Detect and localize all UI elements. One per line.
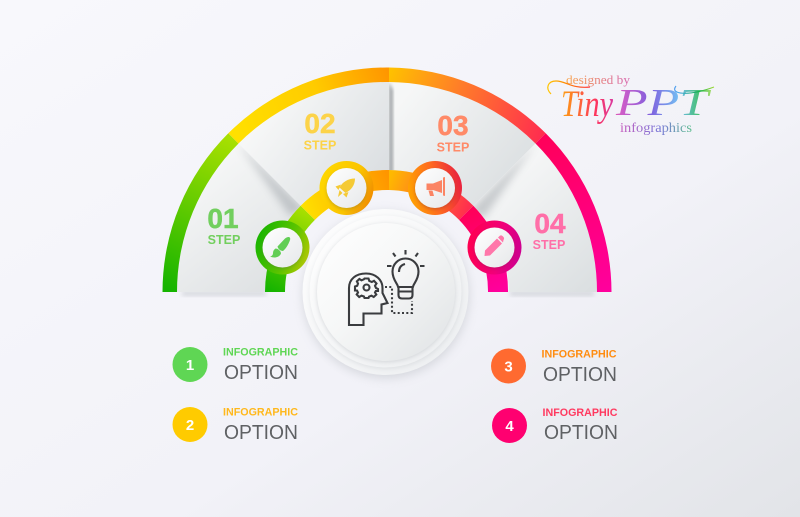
panel: step 1 wedge (177, 144, 301, 292)
panel: step 4 wedge (473, 144, 597, 292)
step 2 label (304, 108, 336, 152)
legend item 4: INFOGRAPHIC (542, 407, 618, 419)
outer colour arc (162, 67, 612, 292)
logo: designed by Tiny PPT infographics: PPT (615, 82, 712, 124)
dotted link (385, 287, 412, 313)
inner colour arc (265, 170, 508, 292)
inner segment 2 (301, 170, 389, 220)
inner segment 4 (459, 206, 508, 292)
logo: designed by Tiny PPT infographics: Tiny (561, 84, 613, 125)
legend item 1 (172, 346, 298, 384)
step 4 label (533, 208, 566, 252)
arc segment 3 (389, 68, 546, 144)
legend item 3: OPTION (543, 364, 617, 386)
icon: pencil (484, 235, 504, 256)
legend item 2: 2 (186, 417, 194, 434)
step 4 label: 04 (534, 208, 566, 239)
gear (355, 278, 378, 298)
icon: brush (270, 237, 290, 258)
legend item 3: 3 (504, 358, 513, 376)
inner segment 3 (389, 170, 473, 220)
step 3 label: 03 (437, 110, 469, 141)
central circle (302, 209, 469, 378)
legend item 4: OPTION (544, 422, 618, 444)
logo: designed by Tiny PPT infographics: infographics (620, 121, 692, 136)
node 1: brush (256, 220, 310, 274)
inner segment 1 (265, 206, 315, 292)
icon: head with gear and lightbulb (349, 250, 424, 325)
rays (387, 250, 424, 266)
shadow on step 4 wedge (474, 150, 530, 219)
legend item 2: INFOGRAPHIC (223, 406, 298, 418)
shadow on step 1 wedge (244, 150, 300, 218)
node 3: megaphone (408, 161, 462, 215)
step 4 label: STEP (533, 238, 565, 252)
shadow on step 3 wedge (389, 82, 393, 178)
head outline (349, 274, 388, 325)
legend item 4: 4 (505, 418, 514, 435)
logo: designed by Tiny PPT infographics (548, 72, 714, 136)
legend item 2: OPTION (224, 422, 298, 444)
legend item 2 (172, 406, 298, 444)
step 1 label (207, 203, 240, 247)
arc segment 1 (162, 133, 238, 292)
step 1 label: 01 (207, 203, 239, 234)
ground shadow under fan (182, 291, 594, 296)
icon: rocket (336, 178, 355, 198)
step 3 label: STEP (437, 140, 469, 154)
legend item 3 (491, 348, 617, 386)
logo: designed by Tiny PPT infographics: designed by (566, 72, 631, 87)
semicircle fan panels (177, 82, 597, 296)
legend item 3: INFOGRAPHIC (542, 348, 617, 360)
legend item 1: INFOGRAPHIC (223, 346, 298, 358)
legend item 1: 1 (186, 357, 194, 374)
node 4: pencil (468, 220, 522, 274)
step 2 label: 02 (304, 108, 336, 139)
arc segment 4 (536, 133, 612, 292)
panel: step 2 wedge (238, 82, 389, 206)
step 2 label: STEP (304, 138, 336, 152)
arc segment 2 (228, 67, 389, 144)
legend item 1: OPTION (224, 362, 298, 384)
legend item 4 (492, 407, 618, 444)
lightbulb (392, 258, 418, 287)
step 3 label (437, 110, 469, 154)
step 1 label: STEP (208, 233, 240, 247)
icon: megaphone (426, 177, 445, 196)
node 2: rocket (320, 161, 374, 215)
panel: step 3 wedge (389, 82, 536, 206)
